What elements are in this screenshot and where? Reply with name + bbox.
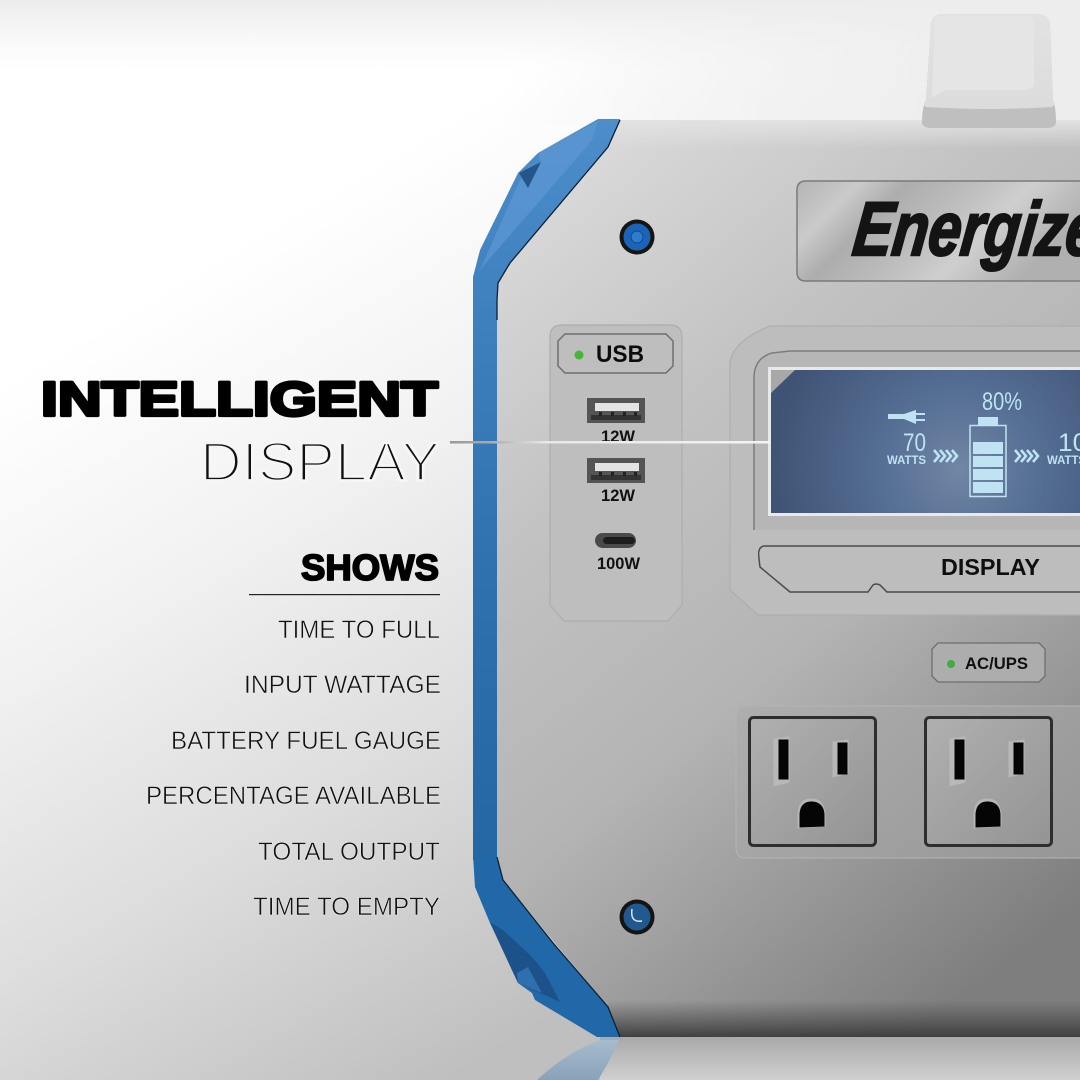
shows heading: SHOWS [301, 547, 439, 588]
top handle [922, 14, 1056, 128]
title [41, 374, 440, 492]
top screw [620, 220, 654, 254]
logo plate [797, 181, 1080, 281]
USB-A port one [587, 398, 645, 446]
output chevrons [1015, 450, 1038, 462]
USB-A port two: 12W [601, 487, 635, 505]
feature list: INPUT WATTAGE [244, 671, 441, 699]
input watts: 70 [903, 429, 926, 457]
USB panel [550, 325, 682, 621]
display bezel [730, 326, 1080, 615]
display screen [770, 368, 1080, 514]
display button [759, 546, 1080, 592]
feature list [146, 616, 441, 921]
feature list: PERCENTAGE AVAILABLE [146, 782, 441, 810]
output watts [1047, 429, 1080, 467]
AC outlet panel [736, 706, 1080, 858]
display button: DISPLAY [941, 554, 1040, 580]
feature list: TIME TO EMPTY [253, 893, 440, 921]
feature list: TOTAL OUTPUT [258, 838, 440, 866]
plug icon [888, 410, 925, 424]
blue bumper side [473, 320, 497, 860]
input watts [887, 429, 926, 467]
input chevrons [934, 450, 957, 462]
feature list: TIME TO FULL [278, 616, 440, 644]
title: intelligent: INTELLIGENT [41, 374, 438, 426]
title: display: DISPLAY [200, 430, 440, 492]
power station body [497, 120, 1080, 1037]
battery percentage: 80% [982, 388, 1022, 416]
USB-C port: 100W [597, 555, 640, 573]
USB-A port two [587, 458, 645, 505]
blue bumper bottom [473, 855, 620, 1037]
outlet one [750, 718, 876, 846]
battery gauge [970, 417, 1006, 496]
blue bumper top [473, 119, 620, 320]
outlet two [926, 718, 1052, 846]
input watts: WATTS [887, 453, 926, 467]
floor reflection [537, 1037, 1080, 1080]
USB-A port one: 12W [601, 428, 635, 446]
callout line [450, 441, 770, 444]
AC/UPS label [932, 643, 1045, 682]
USB label [558, 334, 673, 373]
USB label: USB [596, 341, 644, 368]
AC/UPS label: AC/UPS [965, 655, 1028, 673]
bottom screw [620, 900, 654, 934]
USB-C port [595, 533, 640, 573]
feature list: BATTERY FUEL GAUGE [171, 727, 441, 755]
